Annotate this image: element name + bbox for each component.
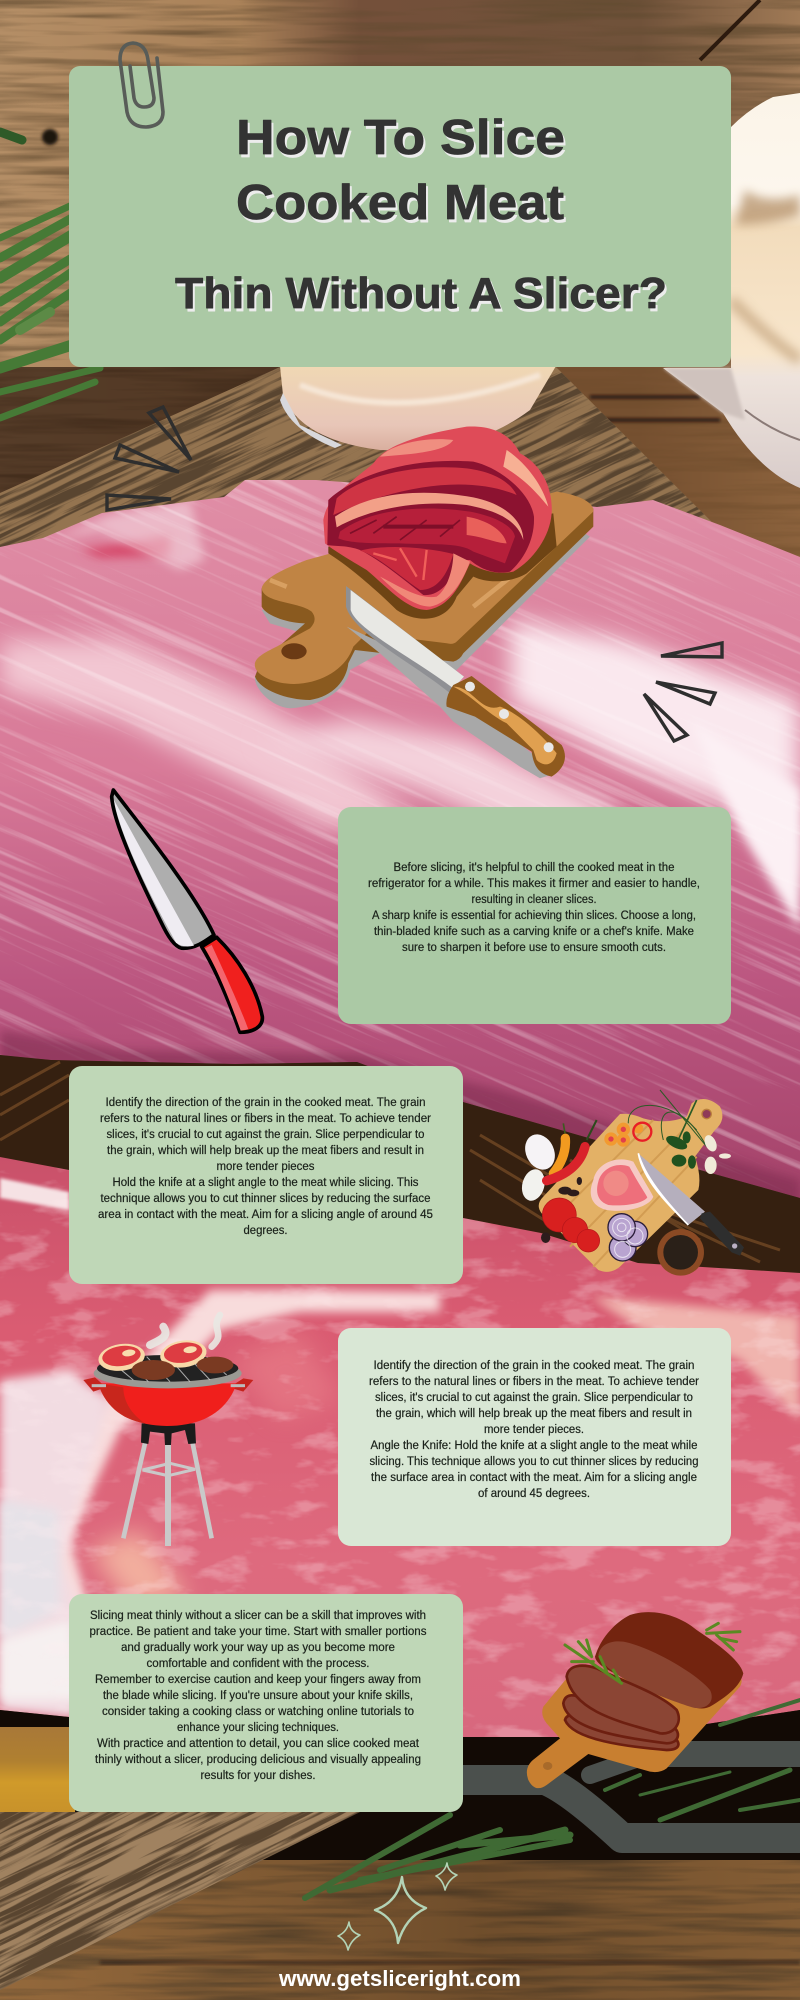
orange pepper: [553, 1138, 565, 1173]
angle text: slicing. This technique allows you to cut thinner slices by reducing: [370, 1456, 698, 1468]
meat fork: [463, 1754, 800, 1838]
illustration: ingredients on cutting board: [519, 1090, 744, 1276]
peppercorn bowl: [657, 1229, 704, 1276]
grain text: technique allows you to cut thinner slices by reducing the surface: [100, 1193, 430, 1205]
practice text: [90, 1610, 427, 1782]
board top: [255, 492, 593, 684]
rosemary sprig bottom: [305, 1700, 800, 1898]
rosemary right: [707, 1623, 740, 1650]
grill grate: [97, 1355, 238, 1382]
knife blade: [112, 790, 214, 948]
lower wood table: [0, 1710, 800, 2000]
wood table top: [0, 0, 800, 567]
icon: paperclip: [120, 43, 163, 127]
wood board: [527, 1677, 742, 1788]
board side: [255, 508, 593, 700]
angle text: the surface area in contact with the meat. Aim for a slicing angle: [371, 1472, 697, 1484]
title line 2: Cooked Meat: [236, 176, 564, 230]
practice text: comfortable and confident with the process.: [146, 1658, 370, 1670]
raw steak right: [158, 1338, 208, 1370]
rosemary sprig top left: [0, 132, 100, 418]
panel: chill and sharpen tips: [338, 807, 731, 1024]
knife handle: [202, 937, 262, 1032]
herbs and chives: [628, 1090, 707, 1147]
practice text: enhance your slicing techniques.: [177, 1722, 339, 1734]
leg collar: [141, 1423, 196, 1445]
middle slice: [563, 1695, 678, 1743]
top slice: [567, 1666, 679, 1733]
knife blade: [346, 586, 464, 693]
grill legs: [123, 1443, 212, 1546]
smoke: [150, 1315, 220, 1347]
practice text: thinly without a slicer, producing delicious and visually appealing: [95, 1754, 421, 1766]
tips text: resulting in cleaner slices.: [472, 894, 596, 906]
side handles: [83, 1377, 253, 1392]
grilled steaks: [132, 1360, 175, 1380]
wooden knife handle at lower left: [0, 1727, 75, 1812]
tips text: thin-bladed knife such as a carving knife or a chef's knife. Make: [374, 926, 694, 938]
panel: title: [69, 66, 731, 367]
angle text: Angle the Knife: Hold the knife at a slight angle to the meat while: [370, 1440, 698, 1452]
red onion slices: [608, 1214, 648, 1261]
board shadow: [255, 517, 590, 708]
raw steak left: [97, 1341, 147, 1374]
tips text: A sharp knife is essential for achieving thin slices. Choose a long,: [372, 910, 696, 922]
practice text: With practice and attention to detail, you can slice cooked meat: [97, 1738, 420, 1750]
small garlic cloves: [702, 1133, 731, 1174]
tips text: sure to sharpen it before use to ensure smooth cuts.: [402, 942, 666, 954]
cutting board behind meat: [0, 367, 711, 547]
icon: triangle accents right: [644, 643, 722, 741]
grill rim: [94, 1358, 242, 1388]
grain text: the grain, which will help break up the meat fibers and result in: [107, 1145, 424, 1157]
roast cut face: [598, 1641, 712, 1708]
meat shadow: [328, 513, 557, 619]
practice text: the blade while slicing. If you're unsure about your knife skills,: [103, 1690, 413, 1702]
icon: red-handled kitchen knife: [112, 790, 262, 1032]
grain text: degrees.: [244, 1225, 288, 1237]
grain text: Hold the knife at a slight angle to the meat while slicing. This: [112, 1177, 419, 1189]
rosemary left: [565, 1640, 622, 1683]
garlic clove: [280, 366, 556, 450]
icon: triangle accents top left: [107, 407, 191, 510]
panel: practice and safety tips: [69, 1594, 463, 1812]
tips text: Before slicing, it's helpful to chill the cooked meat in the: [394, 862, 674, 874]
angle text: more tender pieces.: [484, 1424, 584, 1436]
knife handle: [446, 676, 565, 777]
grain text: slices, it's crucial to cut against the grain. Slice perpendicular to: [106, 1129, 424, 1141]
grill bowl: [98, 1383, 237, 1426]
practice text: results for your dishes.: [200, 1770, 316, 1782]
wood board: [539, 1099, 722, 1272]
practice text: consider taking a cooking class or watching online tutorials to: [102, 1706, 414, 1718]
panel: grain direction tips: [69, 1066, 463, 1284]
ham slice: [591, 1159, 653, 1211]
practice text: practice. Be patient and take your time. Start with smaller portions: [90, 1626, 427, 1638]
board diagonal lower left: [0, 1812, 360, 1990]
grain text: [98, 1097, 433, 1237]
angle text: the grain, which will help break up the meat fibers and result in: [376, 1408, 692, 1420]
title line 1: How To Slice: [236, 111, 565, 165]
grain text: Identify the direction of the grain in the cooked meat. The grain: [106, 1097, 426, 1109]
practice text: Slicing meat thinly without a slicer can be a skill that improves with: [90, 1610, 426, 1622]
icon: sparkles: [338, 1863, 457, 1950]
angle text: refers to the natural lines or fibers in the meat. To achieve tender: [369, 1376, 699, 1388]
title line 3: Thin Without A Slicer?: [175, 269, 667, 318]
tomato slices: [542, 1198, 600, 1252]
grain text: more tender pieces: [216, 1161, 315, 1173]
garlic bulb: [663, 93, 800, 488]
red chili: [547, 1147, 585, 1181]
angle text: slices, it's crucial to cut against the grain. Slice perpendicular to: [375, 1392, 693, 1404]
angle text: Identify the direction of the grain in the cooked meat. The grain: [374, 1360, 694, 1372]
tips text: [368, 862, 700, 954]
tips text: refrigerator for a while. This makes it firmer and easier to handle,: [368, 878, 700, 890]
black beans: [541, 1177, 582, 1243]
dark wood strip between meat cuts: [0, 1055, 800, 1275]
raw meat cut: [323, 427, 552, 610]
illustration: sliced roast on board: [527, 1612, 743, 1788]
grain text: area in contact with the meat. Aim for a slicing angle of around 45: [98, 1209, 433, 1221]
angle text: of around 45 degrees.: [478, 1488, 590, 1500]
lower cut of raw meat: [0, 1157, 800, 1740]
panel: angle the knife tips: [338, 1328, 731, 1546]
board hole: [281, 643, 307, 659]
angle text: [369, 1360, 699, 1500]
grain text: refers to the natural lines or fibers in the meat. To achieve tender: [100, 1113, 431, 1125]
footer: website url: www.getsliceright.com: [278, 1966, 521, 1991]
roast back: [595, 1612, 743, 1708]
upper cut of raw meat: [0, 480, 800, 1198]
illustration: barbecue grill with steaks: [83, 1315, 253, 1546]
practice text: and gradually work your way up as you become more: [121, 1642, 395, 1654]
orange slices and red pepper ring: [604, 1123, 643, 1147]
practice text: Remember to exercise caution and keep your fingers away from: [95, 1674, 421, 1686]
illustration: meat on cutting board with knife: [255, 427, 593, 778]
garlic pieces and egg: [520, 1129, 560, 1175]
chef knife: [638, 1153, 705, 1225]
bottom slice: [565, 1715, 678, 1750]
knife shadow: [347, 627, 557, 778]
